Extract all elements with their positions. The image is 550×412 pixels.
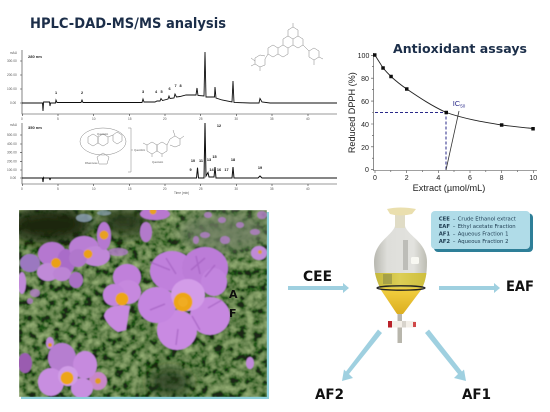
title: HPLC-DAD-MS/MS analysis: HPLC-DAD-MS/MS analysis [30, 16, 226, 32]
chromatogram: 280 nm: 0 [21, 117, 23, 121]
chromatogram: 280 nm: 35 [270, 117, 274, 121]
chromatogram: 280 nm: 4 [155, 90, 158, 94]
label: EAF: EAF [506, 279, 534, 295]
chromatogram: 280 nm: 15 [128, 117, 132, 121]
label: AF1: AF1 [462, 387, 491, 403]
heading: Antioxidant assays: Antioxidant assays [393, 42, 527, 57]
chromatogram: 280 nm: 8 [179, 84, 182, 88]
chromatogram: 350 nm: 300.00 [7, 150, 17, 154]
line chart: reduced DPPH vs extract: 20 [361, 145, 369, 152]
chromatogram: 350 nm: 13 [207, 158, 211, 162]
chromatogram: 280 nm: 280 nm [28, 54, 42, 59]
funnel ring [377, 286, 425, 290]
legend box: Crude Ethanol extract [458, 217, 516, 223]
chromatogram: 350 nm: 10 [191, 159, 195, 163]
chromatogram: 280 nm: 5 [57, 117, 59, 121]
label: AF2: AF2 [315, 387, 344, 403]
chromatogram: 350 nm: 17 [224, 168, 229, 172]
structure: tannin molecule [251, 23, 323, 71]
legend box: – [453, 239, 456, 245]
chromatogram: 350 nm: 100.00 [7, 168, 17, 172]
structure: quercetin glycoside with bracket [80, 128, 146, 172]
line chart: reduced DPPH vs extract: 6 [468, 175, 472, 182]
funnel neck and stopper [395, 214, 405, 228]
small flowers [18, 246, 267, 390]
chromatogram: 280 nm: 3 [142, 90, 144, 94]
line chart: reduced DPPH vs extract: 100 [358, 53, 369, 60]
legend box: Aqueous Fraction 1 [458, 232, 508, 238]
chromatogram: 280 nm: 20 [163, 117, 167, 121]
photo: pink rockrose flowers with blue shadow: F [229, 307, 237, 320]
line chart: reduced DPPH vs extract: 0 [373, 175, 377, 182]
separatory funnel [374, 208, 427, 343]
chromatogram: 350 nm: 20 [163, 187, 167, 191]
arrow: funnel to EAF [439, 283, 500, 293]
chromatogram: 280 nm: 5 [160, 90, 163, 94]
chromatogram: 350 nm: 15 [128, 187, 132, 191]
chromatogram: 350 nm: 15 [212, 155, 217, 159]
distant blossoms [27, 211, 267, 304]
chromatogram: 350 nm: 400.00 [7, 142, 17, 146]
chromatogram: 350 nm: 30 [234, 187, 238, 191]
line chart: reduced DPPH vs extract: 10 [529, 175, 537, 182]
chromatogram: 280 nm: 0.00 [10, 101, 16, 105]
chromatogram: 280 nm: 7 [174, 84, 177, 88]
line chart: reduced DPPH vs extract: 40 [361, 122, 369, 129]
structure: quercetin glycoside with bracket: Rhamnose [85, 161, 98, 165]
chromatogram: 280 nm: 10 [92, 117, 96, 121]
legend box: CEE [439, 217, 450, 223]
chromatogram: 350 nm: 11 [199, 159, 203, 163]
arrow: funnel to AF1 [425, 330, 466, 381]
chromatogram: 350 nm: 35 [270, 187, 274, 191]
chromatogram: 350 nm: mAU [10, 123, 18, 127]
flower: upper left [37, 242, 75, 281]
legend box: – [453, 224, 456, 230]
structure: quercetin: Quercetin [152, 160, 164, 164]
chromatogram: 280 nm: 30 [234, 117, 238, 121]
flower: large centre [138, 247, 230, 350]
arrow: funnel to AF2 [342, 330, 382, 381]
chromatogram: 280 nm: 2 [81, 91, 83, 95]
chromatogram: 350 nm: 5 [57, 187, 59, 191]
line chart: reduced DPPH vs extract: 80 [361, 76, 369, 83]
chromatogram: 350 nm: 350 nm [28, 125, 42, 130]
chromatogram: 280 nm: 100.00 [7, 87, 17, 91]
chromatogram: 350 nm: 200.00 [7, 160, 17, 164]
arrow: CEE to funnel [288, 283, 349, 293]
chromatogram: 280 nm: 25 [199, 117, 203, 121]
line chart: reduced DPPH vs extract: 50 [460, 104, 466, 108]
legend box: Ethyl acetate Fraction [458, 224, 516, 230]
chromatogram: 280 nm: 300.00 [7, 59, 17, 63]
chromatogram: 350 nm: 19 [258, 166, 262, 170]
chromatogram: 350 nm: 0 [21, 187, 23, 191]
chromatogram: 350 nm: 40 [306, 187, 310, 191]
chromatogram: 350 nm: 25 [199, 187, 203, 191]
chromatogram: 280 nm: 1 [55, 91, 57, 95]
line chart: reduced DPPH vs extract [347, 53, 537, 193]
line chart: reduced DPPH vs extract: 60 [361, 99, 369, 106]
line chart: reduced DPPH vs extract: IC [453, 99, 460, 108]
chromatogram: 350 nm: 500.00 [7, 133, 17, 137]
legend box: AF2 [439, 239, 450, 245]
line chart: reduced DPPH vs extract: 2 [405, 175, 409, 182]
legend box: AF1 [439, 232, 450, 238]
line chart: reduced DPPH vs extract: 8 [500, 175, 504, 182]
line chart: reduced DPPH vs extract: Reduced DPPH (%) [347, 72, 357, 153]
photo: pink rockrose flowers with blue shadow [8, 207, 270, 399]
funnel glass body [374, 226, 427, 314]
flower: second [103, 264, 141, 332]
label: CEE: CEE [303, 269, 332, 285]
chromatogram: 280 nm: 40 [306, 117, 310, 121]
stray letters: A [229, 288, 238, 301]
structure: quercetin glycoside with bracket: Quercetin [97, 132, 109, 136]
flower: top [140, 208, 170, 242]
chromatogram: 350 nm [7, 123, 337, 195]
legend box [431, 211, 533, 252]
chromatogram: 350 nm: 16 [217, 168, 221, 172]
legend box: Aqueous Fraction 2 [458, 239, 508, 245]
line chart: reduced DPPH vs extract: 4 [436, 175, 440, 182]
flower: bottom left [38, 343, 97, 398]
chromatogram: 280 nm: 200.00 [7, 73, 17, 77]
structure: quercetin glycoside with bracket: Quercitrin [134, 148, 146, 152]
funnel stem and stopcock [388, 312, 416, 343]
chromatogram: 350 nm: 18 [231, 158, 235, 162]
chromatogram: 280 nm: 6 [168, 87, 171, 91]
chromatogram: 280 nm: mAU [10, 51, 18, 55]
chromatogram: 350 nm: 12 [217, 124, 221, 128]
chromatogram: 280 nm [7, 50, 337, 121]
legend box: EAF [439, 224, 450, 230]
structure: quercetin [143, 130, 184, 164]
chromatogram: 350 nm: 0.00 [10, 176, 16, 180]
chromatogram: 350 nm: Time (min) [174, 191, 189, 195]
legend box: – [453, 217, 456, 223]
line chart: reduced DPPH vs extract: 0 [365, 167, 369, 174]
flower: upper middle [69, 222, 111, 288]
chromatogram: 350 nm: 14 [209, 168, 214, 172]
chromatogram: 350 nm: 9 [189, 168, 192, 172]
legend box: – [453, 232, 456, 238]
chromatogram: 350 nm: 10 [92, 187, 96, 191]
line chart: reduced DPPH vs extract: Extract (µmol/mL) [413, 183, 485, 193]
